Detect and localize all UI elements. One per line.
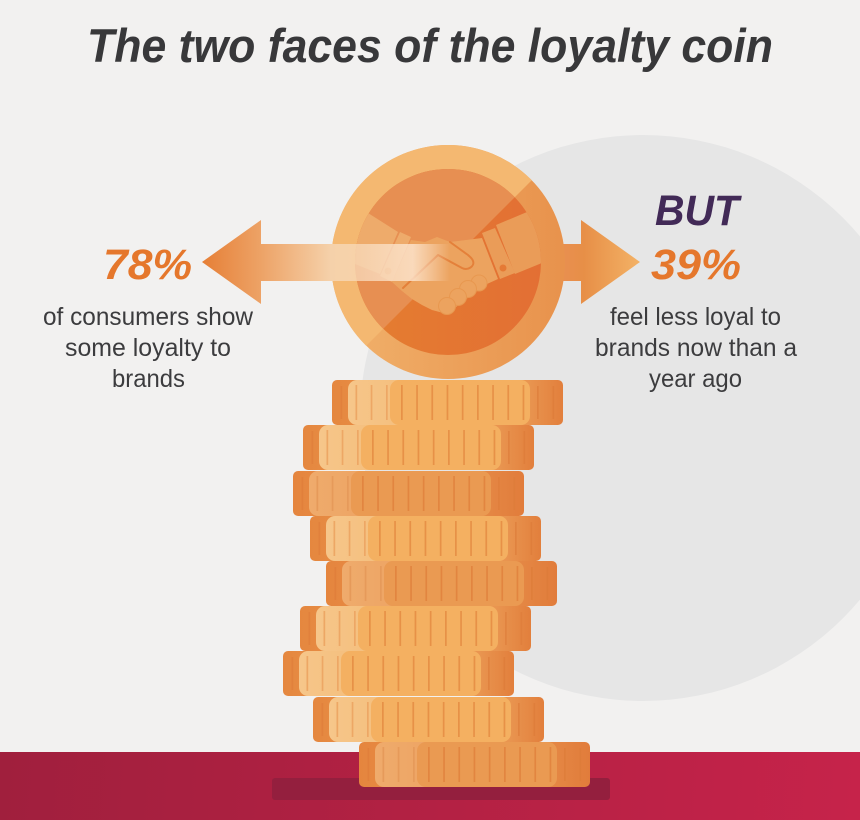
stacked coin 4 <box>310 516 541 561</box>
BUT label: BUT <box>655 187 743 235</box>
finger 2 <box>450 288 466 306</box>
stacked coin 7 <box>283 651 514 696</box>
right statistic: BUT 39 percent <box>595 187 797 393</box>
right description: brands now than a <box>595 334 797 362</box>
large grey background circle <box>360 135 860 701</box>
right sleeve <box>496 212 541 274</box>
right description: feel less loyal to <box>610 303 781 331</box>
right cuff <box>482 228 515 279</box>
left sleeve <box>357 214 398 244</box>
left cuff button <box>384 268 392 274</box>
stacked coin 8 <box>313 697 544 742</box>
left statistic: 78 percent <box>43 241 254 393</box>
left arrow <box>202 220 450 304</box>
fingers <box>438 275 487 314</box>
stacked coin 1 <box>332 380 563 425</box>
stacked coin 6 <box>300 606 531 651</box>
right percentage: 39% <box>651 241 741 289</box>
stacked coin 5 <box>326 561 557 606</box>
large handshake coin <box>332 145 564 379</box>
right description <box>595 303 797 393</box>
coin stack shadow <box>272 778 610 800</box>
left description: brands <box>112 365 185 393</box>
coin rim <box>331 145 565 379</box>
left description: of consumers show <box>43 303 254 331</box>
icon: handshake <box>357 212 541 315</box>
right cuff button <box>500 264 506 272</box>
left description <box>43 303 254 393</box>
left percentage: 78% <box>103 241 192 289</box>
hand outline details <box>403 242 473 288</box>
coin stack <box>283 380 590 787</box>
right arrow <box>560 220 640 304</box>
finger 1 <box>438 298 456 314</box>
clasped hands <box>392 237 498 314</box>
stacked coin 9 <box>359 742 590 787</box>
red floor <box>0 752 860 820</box>
title: The two faces of the loyalty coin <box>87 19 773 72</box>
stacked coin 2 <box>303 425 534 470</box>
stacked coin 3 <box>293 471 524 516</box>
rim highlight <box>332 145 532 346</box>
face highlight <box>356 169 514 328</box>
finger 4 <box>471 275 487 291</box>
left description: some loyalty to <box>65 334 231 362</box>
left cuff <box>390 232 411 282</box>
coin face <box>355 169 541 355</box>
finger 3 <box>460 280 476 298</box>
right description: year ago <box>649 365 742 393</box>
